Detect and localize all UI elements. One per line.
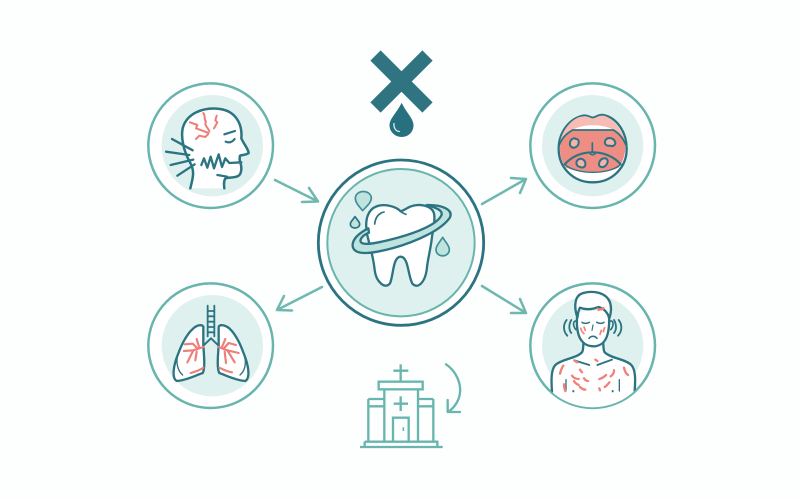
arrow: curved return [446, 364, 460, 412]
icon: person [552, 292, 635, 415]
icon: rash marks [560, 308, 628, 391]
panel: jaw and head pain circle [148, 83, 273, 208]
panel: skin rash circle [530, 283, 655, 415]
icon: water drop [389, 102, 414, 138]
infographic diagram [147, 50, 656, 448]
icon: droplet right [436, 237, 449, 256]
icon: droplet left [350, 217, 360, 228]
icon: lungs outline [174, 306, 248, 381]
icon: head profile [166, 109, 249, 188]
panel: lungs circle [148, 283, 273, 408]
icon: droplet upper [355, 191, 371, 211]
arrow: tooth to mouth [482, 178, 526, 204]
arrow: tooth to lungs [277, 287, 322, 310]
icon: tooth with orbit ring [350, 191, 451, 286]
panel: central tooth circle [318, 160, 484, 325]
icon: open mouth [559, 115, 627, 182]
icon: ulcers [570, 138, 615, 167]
panel: mouth sores circle [530, 83, 655, 208]
icon: inflamed bronchi [184, 339, 239, 373]
icon: crossed-out X [376, 56, 428, 108]
arrow: head pain to tooth [275, 180, 318, 202]
icon: pain nerves [190, 113, 217, 139]
icon: hospital [360, 364, 460, 447]
arrow: tooth to skin [482, 286, 526, 313]
